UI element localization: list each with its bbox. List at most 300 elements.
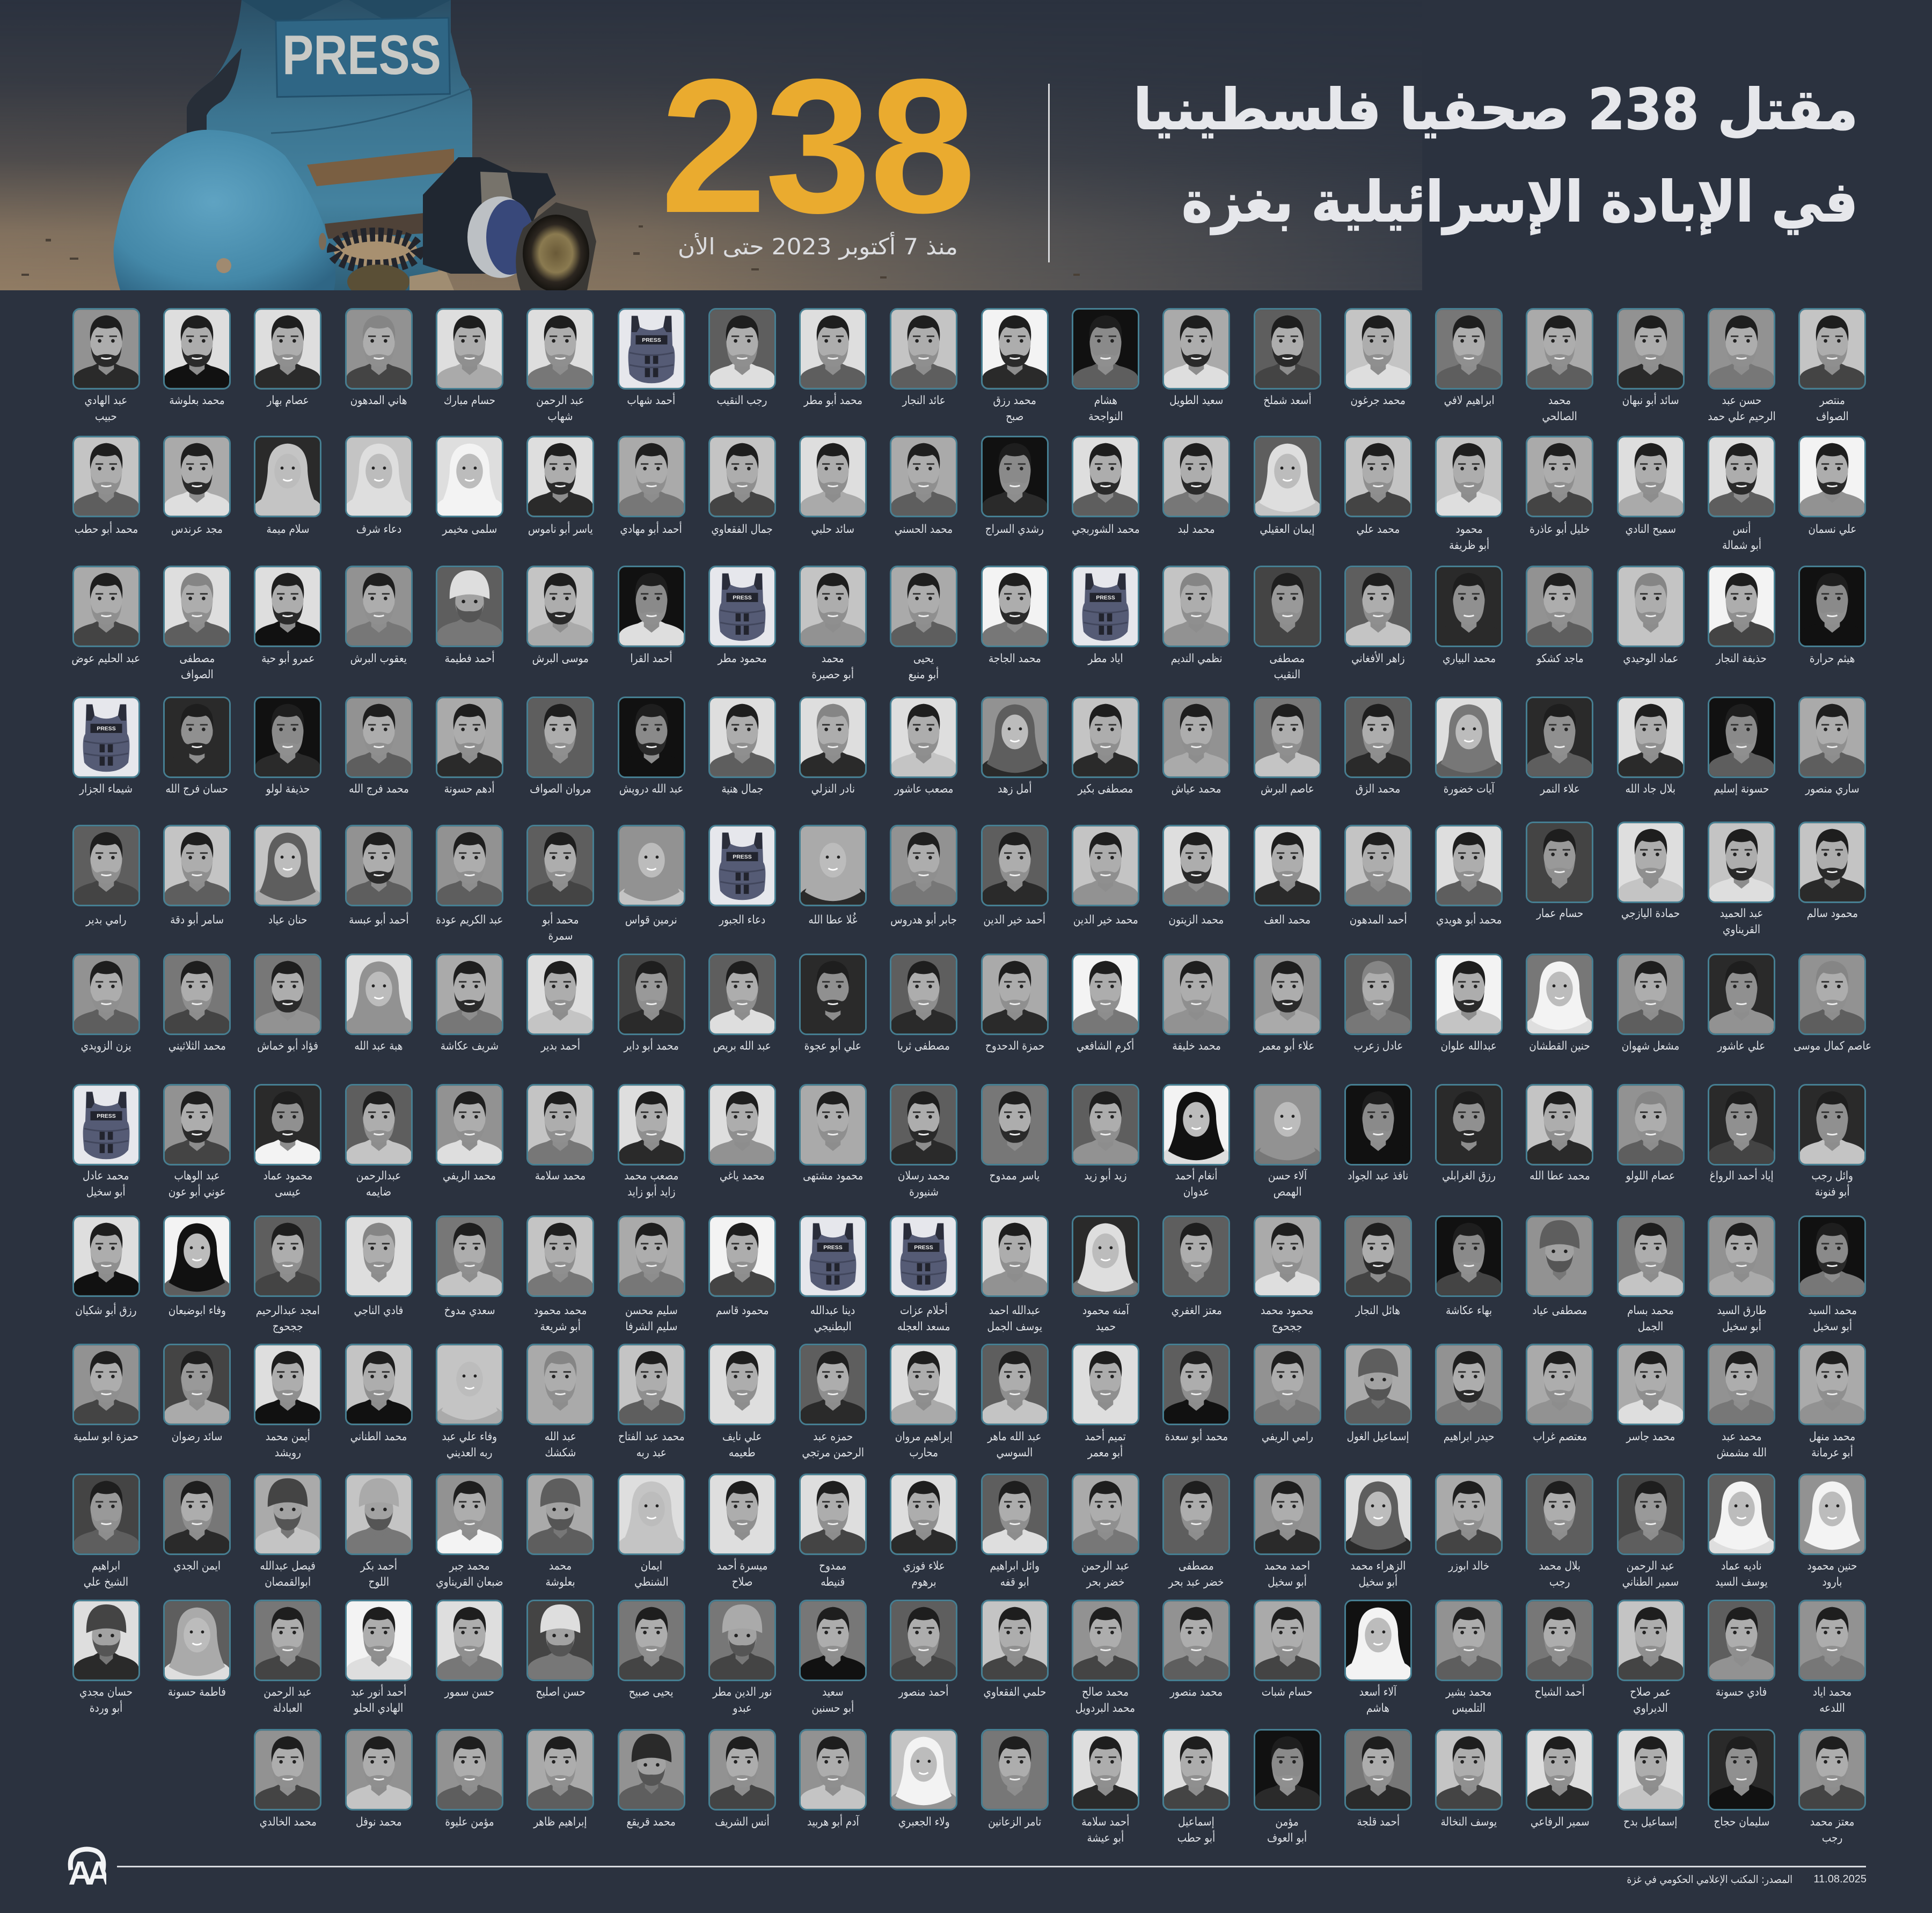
portrait [1787, 1600, 1878, 1716]
portrait [606, 697, 697, 797]
portrait: ابوالقمصان [265, 1575, 311, 1588]
portrait: محمد جرغون [1351, 394, 1406, 407]
portrait [1060, 954, 1151, 1054]
portrait: محمد أبو سعدة [1165, 1430, 1228, 1443]
portrait: موسى البرش [532, 652, 589, 665]
portrait row 7 [61, 1084, 1878, 1200]
portrait [61, 1474, 151, 1590]
portrait [787, 1215, 879, 1335]
headline line 2: في الإبادة الإسرائيلية بغزة [1182, 169, 1858, 235]
portrait: محمد عبد [1722, 1430, 1761, 1443]
portrait: صلاح [731, 1575, 752, 1588]
portrait [151, 566, 243, 683]
portrait: مجد عرندس [171, 523, 223, 536]
portrait [151, 308, 243, 409]
portrait [61, 436, 151, 538]
portrait [1435, 308, 1503, 407]
portrait [1424, 697, 1514, 797]
portrait: فيصل عبدالله [260, 1559, 316, 1573]
portrait [424, 1084, 515, 1184]
portrait: أحمد فطيمة [444, 652, 494, 665]
portrait [697, 825, 787, 928]
portrait [1242, 1084, 1333, 1200]
portrait: أبو سخيل [1268, 1575, 1307, 1588]
portrait: أبو حصيرة [812, 668, 854, 681]
portrait: أبو عيشة [1087, 1831, 1124, 1845]
portrait [1514, 1600, 1605, 1700]
portrait: آمنه محمود [1082, 1304, 1129, 1317]
portrait [1424, 1344, 1514, 1445]
portrait: نظمي النديم [1170, 652, 1222, 665]
portrait: علي نايف [722, 1430, 762, 1443]
portrait: ربه العديني [447, 1446, 493, 1460]
portrait [879, 1084, 969, 1200]
portrait: محمد بعلوشة [169, 394, 225, 407]
portrait: الجمل [1638, 1320, 1663, 1333]
portrait: يوسف السيد [1715, 1575, 1768, 1588]
portrait: محمد خليفة [1172, 1039, 1221, 1053]
portrait [1060, 1474, 1151, 1590]
portrait [1787, 697, 1878, 797]
portrait [1151, 1729, 1242, 1846]
portrait [151, 436, 243, 538]
portrait: سلام ميمة [266, 523, 309, 536]
portrait: جابر أبو هدروس [890, 913, 957, 927]
portrait [1424, 436, 1514, 553]
portrait [1696, 1474, 1787, 1590]
portrait [1333, 1474, 1424, 1590]
portrait: عبد الرحمن [1081, 1559, 1130, 1573]
portrait: دعاء الجبور [719, 913, 765, 927]
portrait: سمير الرفاعي [1531, 1815, 1589, 1829]
press vest: PRESS [282, 24, 441, 86]
portrait [879, 1344, 969, 1461]
portrait [1242, 1344, 1333, 1445]
portrait: ضبعان القريناوي [436, 1575, 503, 1588]
portrait: محمد ياغي [720, 1169, 765, 1183]
portrait [1242, 566, 1333, 683]
coiled cable and microphone [334, 234, 454, 299]
portrait [1333, 1215, 1424, 1319]
portrait: معتصم غراب [1533, 1430, 1587, 1443]
portrait: سعيد الطويل [1169, 394, 1223, 407]
portrait: رزق الغرابلي [1442, 1169, 1496, 1183]
portrait [1787, 1084, 1878, 1200]
portrait: حذيفة النجار [1716, 652, 1767, 665]
portrait: شكشك [545, 1446, 576, 1460]
portrait [697, 1084, 787, 1184]
portrait [1696, 697, 1787, 797]
portrait [515, 825, 606, 944]
portrait [787, 825, 879, 928]
portrait: محمد أبو حطب [74, 523, 138, 536]
portrait: محمد أبو [542, 913, 579, 927]
portrait: ججحوج [273, 1320, 303, 1333]
portrait: أدهم حسونة [444, 782, 495, 796]
portrait [243, 697, 333, 797]
portrait [1787, 1474, 1878, 1590]
portrait: عمرو أبو حية [261, 652, 314, 665]
portrait [333, 436, 424, 538]
portrait [1242, 1474, 1333, 1590]
portrait [1060, 1344, 1151, 1461]
portrait: حسونة إسليم [1714, 782, 1769, 796]
portrait: عبدو [733, 1701, 751, 1715]
portrait: ياسر أبو ناموس [528, 523, 593, 536]
portrait [333, 1600, 424, 1716]
portrait: حميد [1095, 1320, 1116, 1333]
portrait: عادل زعرب [1353, 1039, 1403, 1053]
portrait row 6 [61, 954, 1878, 1054]
portrait [1605, 1084, 1696, 1184]
portrait [969, 954, 1060, 1054]
portrait: محمد [822, 652, 844, 665]
portrait [424, 1344, 515, 1461]
portrait: محمد جبر [449, 1559, 490, 1573]
portrait [697, 308, 787, 409]
portrait [787, 1344, 879, 1461]
portrait [1787, 822, 1878, 922]
portrait [969, 1084, 1060, 1184]
portrait: ولاء الجعبري [898, 1815, 949, 1829]
portrait: محمد علي [1357, 523, 1400, 536]
portrait: سعيد [822, 1685, 844, 1699]
portrait: أحمد منصور [899, 1685, 949, 1699]
portrait: سمرة [548, 929, 573, 942]
portrait: ياسر ممدوح [990, 1169, 1040, 1183]
portrait: إسماعيل [1178, 1815, 1214, 1829]
portrait: فادي حسونة [1716, 1685, 1767, 1699]
portrait: حسن سمور [445, 1685, 494, 1699]
portrait: تميم أحمد [1085, 1430, 1126, 1443]
portrait: ابراهيم [92, 1559, 120, 1573]
portrait: مصطفى ثريا [897, 1039, 950, 1053]
source note: المصدر: المكتب الإعلامي الحكومي في غزة [1627, 1873, 1792, 1886]
portrait [969, 1344, 1060, 1461]
portrait [606, 1729, 697, 1830]
portrait [606, 1215, 697, 1335]
portrait: الرحيم علي حمد [1708, 410, 1775, 423]
portrait: محمد الزيتون [1169, 913, 1224, 927]
portrait: العبادلة [273, 1701, 303, 1715]
portrait [787, 566, 879, 683]
portrait [1333, 825, 1424, 928]
portrait: حسان مجدي [79, 1685, 133, 1699]
portrait: محمود محمد [1261, 1304, 1314, 1317]
portrait [333, 566, 424, 666]
portrait: محمد عطا الله [1529, 1169, 1590, 1183]
portrait [1060, 1215, 1151, 1335]
portrait: أيمن محمد [266, 1430, 310, 1443]
portrait [1787, 1729, 1878, 1846]
portrait: محمود قاسم [716, 1304, 769, 1317]
portrait: محمد محمود [534, 1304, 587, 1317]
portrait [981, 308, 1049, 423]
portrait [969, 1600, 1060, 1700]
portrait [1162, 308, 1230, 407]
portrait: مصطفى [1270, 652, 1305, 665]
portrait: أحمد بدير [541, 1039, 580, 1053]
portrait: علي نسمان [1808, 523, 1856, 536]
portrait: خضر بحر [1087, 1575, 1124, 1588]
portrait [787, 1474, 879, 1590]
portrait: رجب [1822, 1831, 1843, 1845]
portrait: سليم محسن [625, 1304, 677, 1317]
portrait [1514, 1474, 1605, 1590]
portrait [424, 697, 515, 797]
portrait: سائد حلبي [811, 523, 854, 536]
portrait [243, 308, 333, 409]
portrait [1151, 566, 1242, 666]
portrait: أنس [1732, 523, 1751, 536]
portrait: عيسى [275, 1185, 301, 1199]
portrait: محمد [1548, 394, 1571, 407]
portrait [787, 1084, 879, 1184]
portrait: هاشم [1366, 1701, 1389, 1715]
portrait: التلميس [1452, 1701, 1485, 1715]
portrait [151, 825, 243, 928]
portrait [61, 697, 151, 797]
portrait: أبو سخيل [86, 1185, 126, 1199]
portrait [424, 1474, 515, 1590]
portrait [1787, 954, 1878, 1054]
portrait: حسن عبد [1722, 394, 1761, 407]
portrait: محمد لبد [1178, 523, 1215, 536]
portrait: الرحمن مرتجي [802, 1446, 864, 1460]
portrait: يوسف النخالة [1441, 1815, 1497, 1829]
portrait: ساري منصور [1805, 782, 1860, 796]
portrait: امجد عبدالرحيم [256, 1304, 320, 1317]
portrait: سليمان حجاج [1714, 1815, 1769, 1829]
portrait: محمد عبد الفتاح [618, 1430, 684, 1443]
portrait [1514, 1729, 1605, 1830]
portrait: علاء النمر [1540, 782, 1579, 796]
portrait: محمد أبو داير [624, 1039, 679, 1053]
portrait [787, 436, 879, 538]
portrait [1151, 954, 1242, 1054]
portrait [151, 1474, 243, 1574]
portrait: شيماء الجزار [79, 782, 133, 796]
portrait [606, 1600, 697, 1700]
portrait: أبو العوف [1268, 1831, 1307, 1845]
portrait: حسام عمار [1536, 907, 1583, 920]
portrait [1151, 825, 1242, 928]
portrait [890, 308, 957, 407]
portrait: أبو سخيل [1722, 1320, 1761, 1333]
portrait: بهاء عكاشة [1446, 1304, 1492, 1317]
portrait row 4 [61, 697, 1878, 797]
portrait [61, 308, 151, 425]
portrait: مصطفى [179, 652, 215, 665]
portrait [515, 1474, 606, 1590]
portrait [1526, 308, 1593, 423]
portrait: البطنيجي [814, 1320, 852, 1333]
portrait [1798, 308, 1866, 423]
portrait [424, 566, 515, 666]
portrait: عصام بهار [267, 394, 309, 407]
portrait [151, 1600, 243, 1700]
portrait: بارود [1823, 1575, 1842, 1588]
portrait: بلال محمد [1539, 1559, 1580, 1573]
portrait: حمزة ابو سلمية [74, 1430, 138, 1443]
portrait: صبح [1006, 410, 1023, 423]
portrait [1060, 697, 1151, 797]
portrait: فاطمة حسونة [168, 1685, 226, 1699]
portrait: أحمد القرا [630, 652, 672, 665]
portrait: محمود سالم [1807, 907, 1858, 920]
portrait [243, 825, 333, 928]
portrait [333, 308, 424, 409]
portrait: محمد نوفل [356, 1815, 401, 1829]
portrait [1242, 1729, 1333, 1846]
portrait: عائد النجار [902, 394, 946, 407]
portrait: أبو سخيل [1359, 1575, 1397, 1588]
portrait [243, 1344, 333, 1461]
portrait: نرمين قواس [625, 913, 677, 927]
portrait: يعقوب البرش [350, 652, 407, 665]
portrait: أبو فنونة [1815, 1185, 1850, 1199]
portrait [333, 825, 424, 928]
portrait [515, 308, 606, 425]
portrait: عبد الرحمن [537, 394, 584, 407]
portrait: اياد مطر [1088, 652, 1123, 665]
portrait [1424, 1474, 1514, 1574]
portrait: سائد أبو نبهان [1622, 394, 1679, 407]
portrait [1151, 1084, 1242, 1200]
portrait [1696, 1600, 1787, 1700]
portrait: ماجد كشكو [1536, 652, 1583, 665]
portrait: حسام شبات [1262, 1685, 1313, 1699]
portrait: الشيخ علي [84, 1575, 128, 1588]
portrait: محمد فرج الله [349, 782, 408, 796]
portrait [151, 954, 243, 1054]
portrait: ايمن الجدي [173, 1559, 221, 1573]
header illustration and headline [0, 0, 1858, 290]
portrait [1605, 1729, 1696, 1830]
portrait [424, 1215, 515, 1319]
portrait [879, 436, 969, 538]
portrait [969, 566, 1060, 666]
portrait [243, 1474, 333, 1590]
portrait: الصالحي [1542, 410, 1577, 423]
portrait [697, 1474, 787, 1590]
portrait: علاء أبو معمر [1260, 1039, 1315, 1053]
portrait [1424, 825, 1514, 928]
portrait [697, 566, 787, 666]
portrait: أبو عرمانة [1812, 1446, 1853, 1460]
footer rule [117, 1866, 1866, 1867]
portrait [333, 1084, 424, 1200]
portrait [1514, 822, 1605, 922]
portrait [1060, 436, 1151, 538]
portrait [1151, 1215, 1242, 1319]
portrait row 1 [72, 308, 1866, 423]
portrait: جمال الفقعاوي [712, 523, 773, 536]
portrait [243, 1215, 333, 1335]
portrait [61, 954, 151, 1054]
subtitle since 7 October 2023: منذ 7 أكتوبر 2023 حتى الأن [678, 232, 958, 260]
portrait: أبو ظريفة [1449, 539, 1489, 552]
portrait: عبد الوهاب [174, 1169, 220, 1183]
portrait row 11 [61, 1600, 1878, 1716]
portrait: أحمد أنور عبد [351, 1685, 407, 1699]
portrait [1696, 1729, 1787, 1830]
portrait [243, 566, 333, 666]
portrait [1333, 1344, 1424, 1445]
portrait [1605, 566, 1696, 666]
portrait [424, 1729, 515, 1830]
portrait: عاصم كمال موسى [1794, 1039, 1871, 1053]
portrait: محمد بسام [1627, 1304, 1674, 1317]
portrait [1060, 825, 1151, 928]
portrait: محمد أبو مطر [804, 394, 862, 407]
portrait [1060, 1600, 1151, 1716]
portrait: حمادة اليازجي [1621, 907, 1680, 920]
portrait: محمد منهل [1809, 1430, 1855, 1443]
portrait: أحمد أبو عبسة [349, 913, 408, 927]
portrait: تامر الزعانين [988, 1815, 1041, 1829]
portrait [1696, 1344, 1787, 1461]
portrait: سائد رضوان [172, 1430, 222, 1443]
portrait [1514, 697, 1605, 797]
portrait: أمل زهد [998, 782, 1031, 796]
portrait: رويشد [275, 1446, 301, 1460]
portrait: محمود [1455, 523, 1482, 536]
portrait: أبو منيع [909, 668, 939, 681]
portrait: سليم الشرفا [625, 1320, 677, 1333]
portrait: محمد [549, 1559, 572, 1573]
portrait [697, 1600, 787, 1716]
portrait: آلاء أسعد [1359, 1685, 1397, 1699]
portrait: الديراوي [1634, 1701, 1668, 1715]
portrait [333, 1729, 424, 1830]
portrait [1333, 436, 1424, 538]
portrait [879, 566, 969, 683]
portrait: سعدي مدوخ [444, 1304, 495, 1317]
portrait: محمد الزق [1356, 782, 1401, 796]
portrait: هيثم حرارة [1810, 652, 1855, 665]
portrait: منتصر [1820, 394, 1845, 407]
portrait [1787, 1215, 1878, 1335]
portrait [969, 436, 1060, 538]
portrait [151, 697, 243, 797]
portrait [1696, 822, 1787, 937]
portrait: رامي الريفي [1261, 1430, 1313, 1443]
portrait: عصام اللولو [1626, 1169, 1675, 1183]
portrait: بعلوشة [546, 1575, 575, 1588]
portrait: القريناوي [1723, 923, 1760, 936]
portrait [1696, 1215, 1787, 1335]
portrait: عبد الله بريص [713, 1039, 771, 1053]
portrait: الصواف [181, 668, 213, 681]
portrait [61, 1600, 151, 1716]
portrait [606, 1474, 697, 1590]
portrait: أبو حسنين [812, 1701, 854, 1715]
portrait [606, 436, 697, 538]
portrait [515, 954, 606, 1054]
portrait [61, 1084, 151, 1200]
portrait [787, 697, 879, 797]
portrait: غُلا عطا الله [809, 913, 858, 927]
portrait [1514, 566, 1605, 666]
press vest [187, 0, 472, 290]
portrait: زيد أبو زيد [1084, 1169, 1127, 1183]
portrait: هبة عبد الله [355, 1039, 403, 1053]
portrait: محمد بشير [1446, 1685, 1492, 1699]
portrait: الله مشمش [1716, 1446, 1767, 1460]
portrait [879, 825, 969, 928]
portrait: أحمد الشياح [1535, 1685, 1585, 1699]
